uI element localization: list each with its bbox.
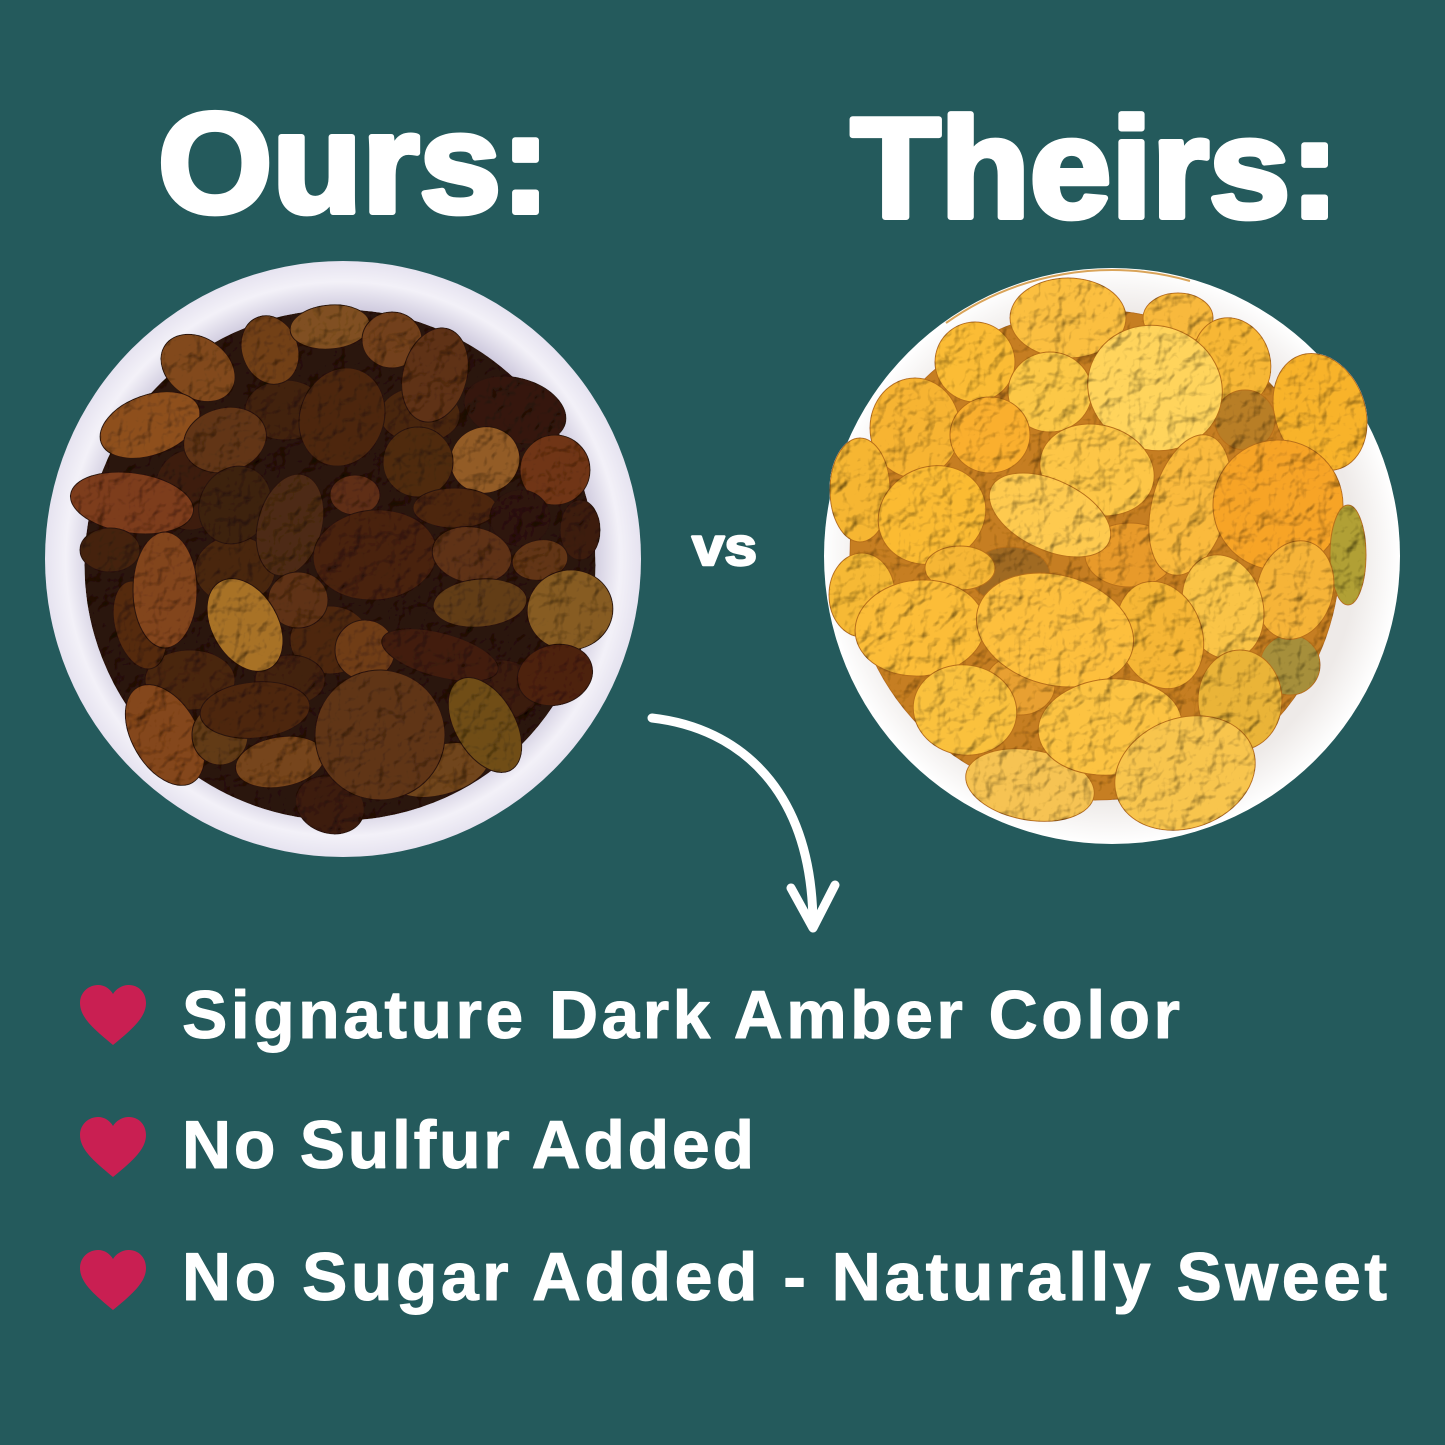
title: Theirs: Theirs:	[851, 89, 1339, 248]
text: benefit 3: No Sugar Added - Naturally Sweet	[182, 1239, 1387, 1315]
bowl: theirs	[824, 268, 1400, 844]
label: vs: vs	[692, 517, 757, 577]
panel: theirs bowl of golden raisins	[824, 268, 1400, 849]
title: Ours: Ours:	[158, 84, 550, 243]
icon: heart 1	[80, 985, 146, 1045]
raisins: dark amber	[66, 302, 619, 843]
bowl rim tint	[946, 270, 1190, 323]
icon: heart 3	[80, 1250, 146, 1310]
bowl: ours	[45, 261, 641, 857]
arrow: from ours bowl to benefit list	[652, 718, 835, 928]
text: benefit 1: Signature Dark Amber Color	[182, 977, 1180, 1053]
panel: ours bowl of dark raisins	[45, 261, 641, 857]
icon: heart 2	[80, 1117, 146, 1177]
text: benefit 2: No Sulfur Added	[182, 1107, 754, 1183]
raisins: golden	[829, 278, 1383, 849]
